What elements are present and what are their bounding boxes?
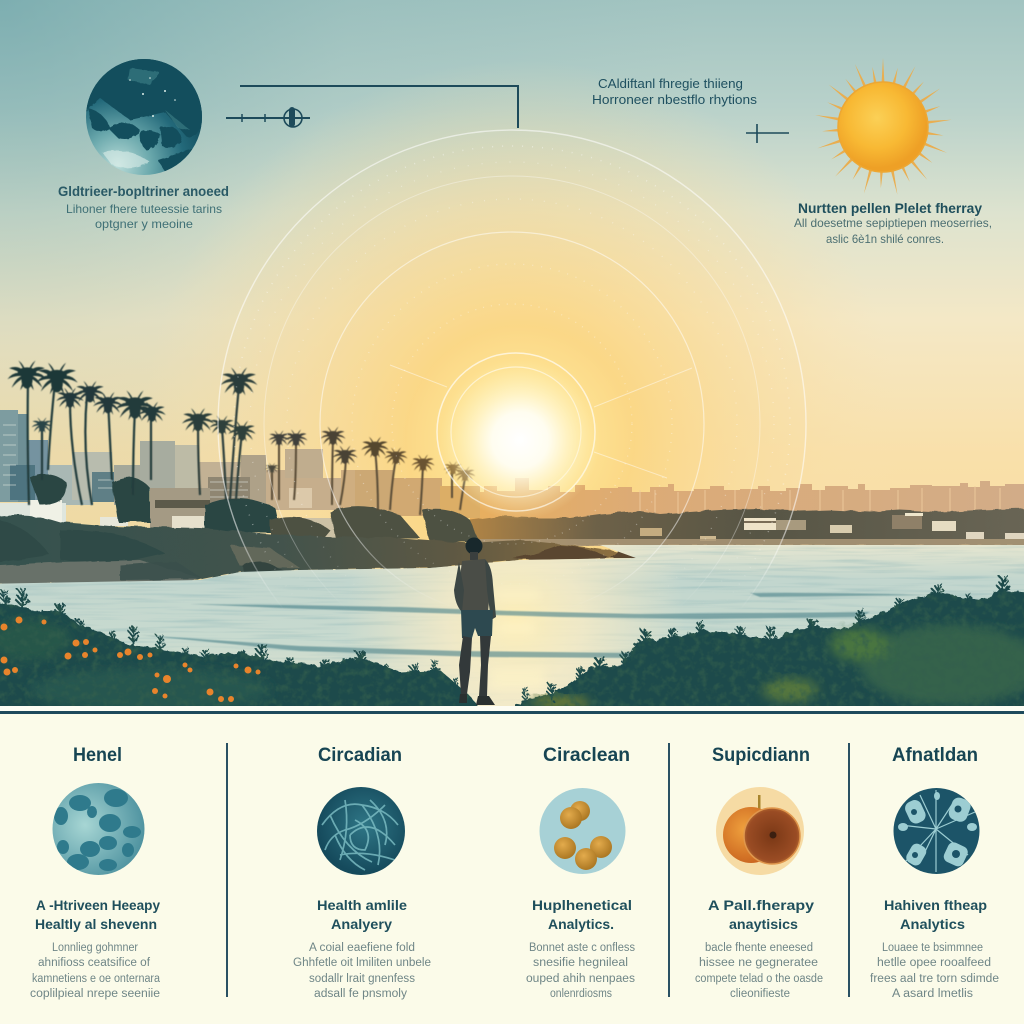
column 4 body: clieonifieste [730,988,790,1000]
column 4 body: hissee ne gegneratee [699,957,818,969]
column 4 subheading [708,897,814,932]
column 4 [695,745,823,1000]
icon: radial diagram [894,788,980,874]
icon: fibre sphere [317,787,405,875]
column 3 subheading [532,897,632,932]
column 4 heading: Supicdiann [712,745,810,766]
crosshair marker right [746,124,789,143]
hero scene [0,0,1024,725]
column 1 subheading [35,897,160,932]
column 5 heading: Afnatldan [892,745,978,766]
column 3 body: onlenrdiosms [550,988,612,1000]
column 5 body [870,942,999,1000]
left headland and rocks [0,515,636,584]
column 3 subheading: Huplhenetical [532,897,632,913]
column 3 subheading: Analytics. [548,916,614,932]
column 2 subheading: Health amlile [317,897,407,913]
column 5 subheading [884,897,987,932]
column 5 body: Louaee te bsimmnee [882,942,983,954]
text: sun caption: All doesetme sepiptiepen meoserries, [794,216,992,230]
column 4 body: compete telad o the oasde [695,973,823,985]
text: top middle caption: CAldiftanl fhregie thiieng [598,76,743,91]
sun core glow [440,360,600,520]
column 3 [526,745,635,1000]
column 1 body: Lonnlieg gohmner [52,942,138,954]
palm trees [7,361,475,515]
connector line top [240,86,518,128]
icon: citrus fruit [716,787,804,875]
column 1 body: kamnetiens e oe onternara [32,973,161,985]
column 5 body: hetlle opee rooalfeed [877,957,991,969]
column 2 heading: Circadian [318,745,402,766]
orange flowers [0,616,260,702]
column 1 [30,745,161,1000]
column 5 [870,745,999,1000]
column 1 body: coplilpieal nrepe seeniie [30,988,160,1000]
text: moon caption: Gldtrieer-bopltriner anoeed [58,183,229,199]
text: moon caption: optgner y meoine [95,217,193,231]
column 5 body: A asard lmetlis [892,988,973,1000]
column 4 body [695,942,823,1000]
column 5 body: frees aal tre torn sdimde [870,973,999,985]
icon: moon globe [84,56,204,175]
column 1 subheading: A -Htriveen Heeapy [36,897,160,913]
column 2 body: sodallr lrait gnenfess [309,973,415,985]
column 3 body [526,942,635,1000]
ocean waves [140,593,930,658]
column 5 subheading: Hahiven ftheap [884,897,987,913]
text: sun caption: Nurtten pellen Plelet fherray [798,200,982,216]
sea [0,545,1024,706]
column 3 heading: Ciraclean [543,745,630,766]
crosshair marker left [226,107,310,127]
column 4 subheading: A Pall.fherapy [708,897,814,913]
icon: golden spheres [540,788,626,874]
radial dial rings [217,129,807,594]
foreground bushes [0,576,1024,725]
icon: cell sphere [52,783,144,875]
column 2 subheading [317,897,407,932]
sky background [0,0,1024,710]
text: sun caption [794,200,992,246]
column 3 body: snesifie hegnileal [533,957,628,969]
column 2 [293,745,431,1000]
column 2 subheading: Analyery [331,916,392,932]
column 2 body: adsall fe pnsmoly [314,988,407,1000]
column 1 subheading: Healtly al shevenn [35,916,157,932]
text: top middle caption [592,76,758,107]
column 2 body: A coial eaefiene fold [309,942,415,954]
column 3 body: Bonnet aste c onfless [529,942,635,954]
foliage sprigs [1,576,1009,702]
column 2 body [293,942,431,1000]
column 3 body: ouped ahih nenpaes [526,973,635,985]
distant skyline [470,478,1024,540]
text: moon caption [58,183,229,231]
column 2 body: Ghhfetle oit lmiliten unbele [293,957,431,969]
column 4 body: bacle fhente eneesed [705,942,813,954]
column 1 heading: Henel [73,745,122,766]
text: top middle caption: Horroneer nbestflo rhytions [592,92,758,107]
text: moon caption: Lihoner fhere tuteessie tarins [66,202,222,216]
column 1 body [30,942,161,1000]
person silhouette [454,538,496,705]
column 4 subheading: anaytisics [729,916,798,932]
icon: sun [815,58,952,195]
left city buildings [0,410,480,542]
column 5 subheading: Analytics [900,916,965,932]
column 1 body: ahnifioss ceatsifice of [38,957,151,969]
text: sun caption: aslic 6è1n shilé conres. [826,232,944,246]
mid shoreline houses [470,508,1024,546]
bottom panel [0,706,1024,1024]
